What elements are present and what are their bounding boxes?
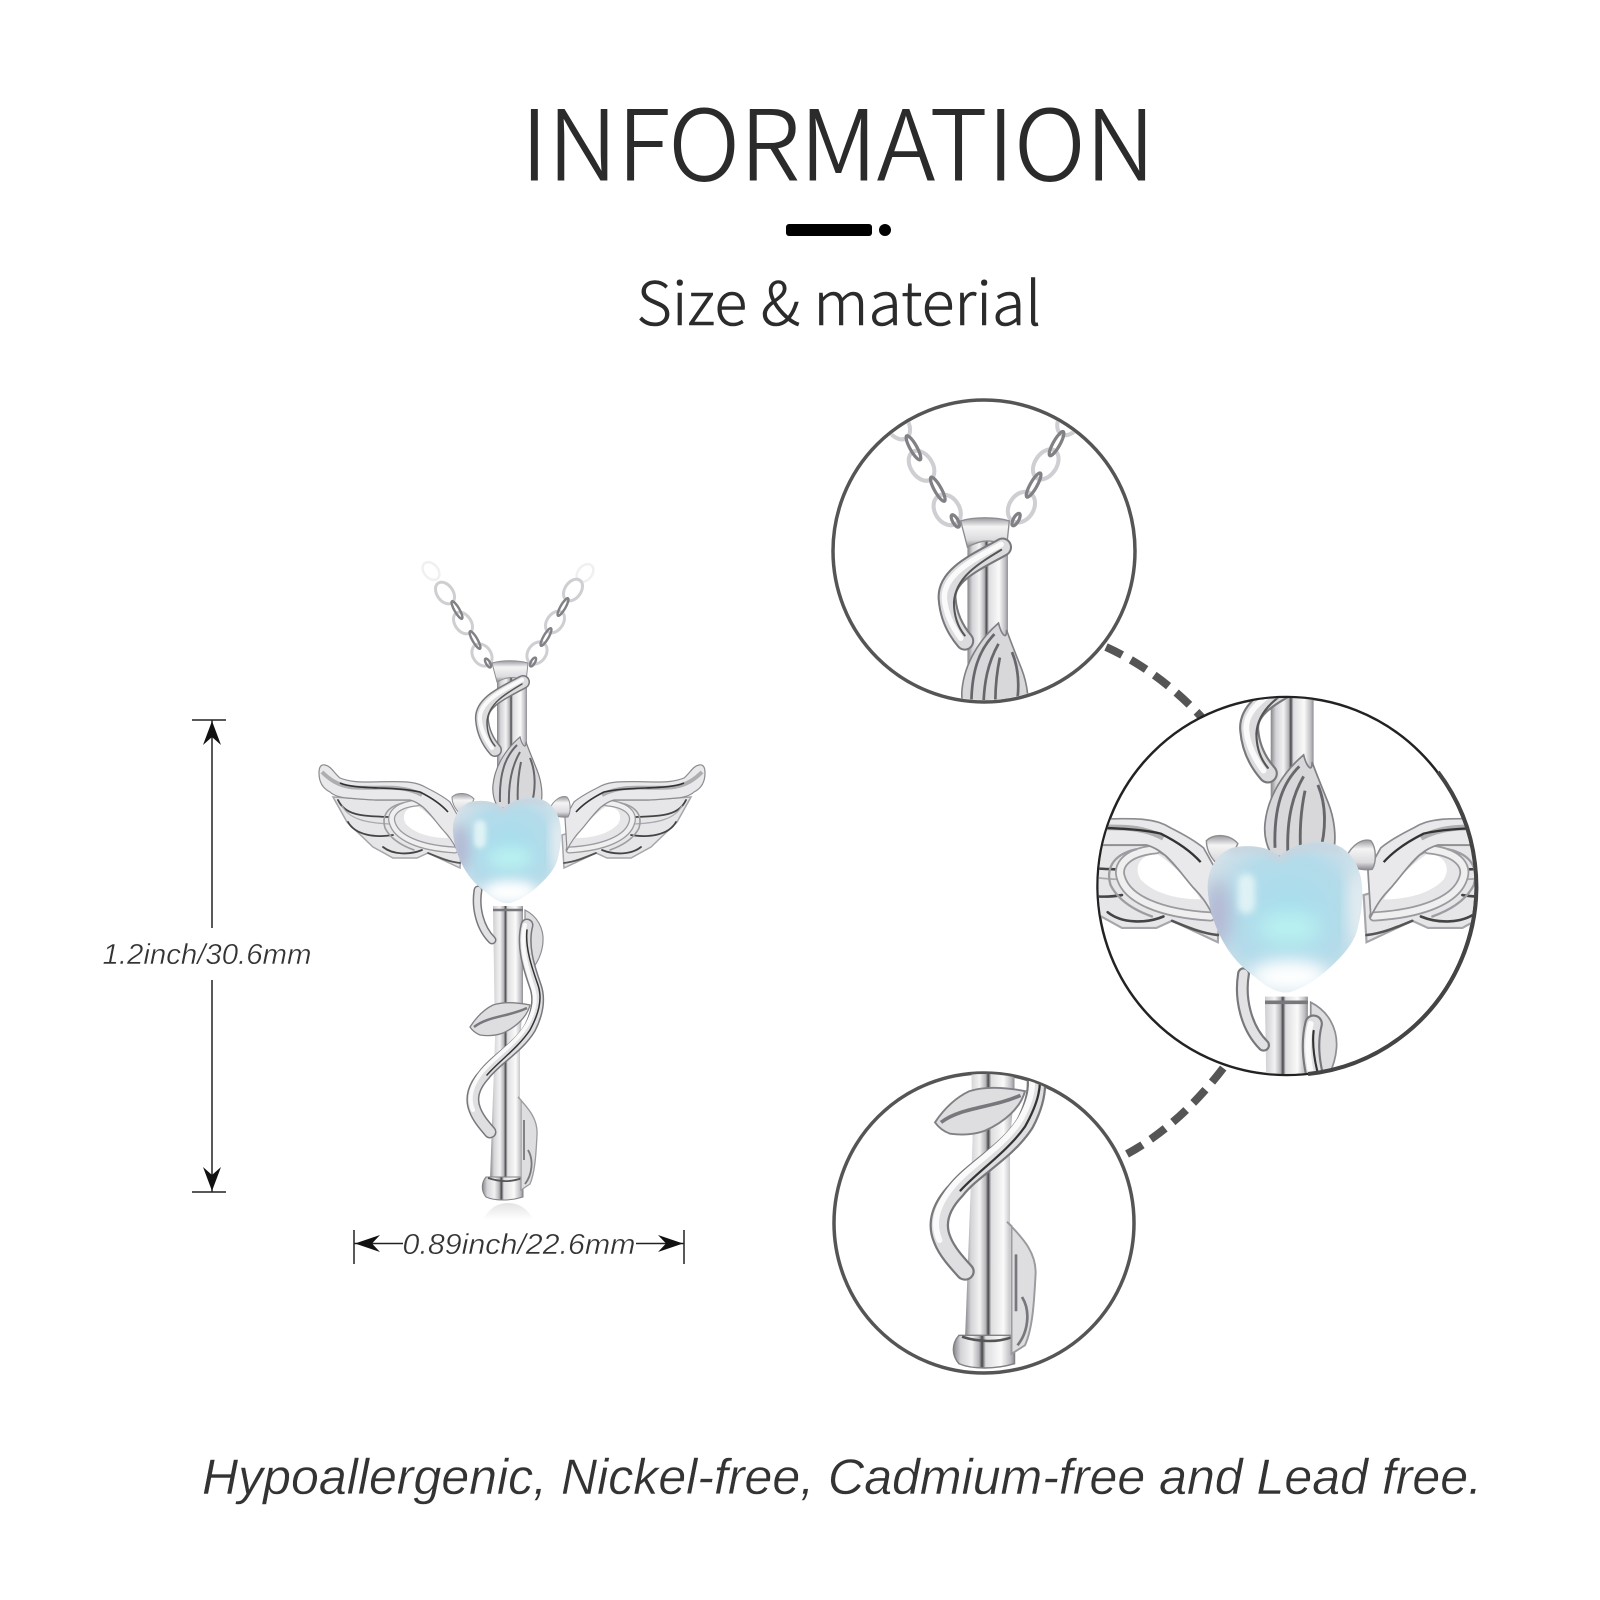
pendant product image <box>319 559 705 1220</box>
detail circle: lower vine and base <box>832 1071 1136 1375</box>
subtitle: Size & material <box>636 256 1042 343</box>
width dimension <box>354 1229 684 1264</box>
detail circle: heart stone and wings <box>1096 696 1478 1076</box>
title: INFORMATION <box>521 67 1155 208</box>
width label: 0.89inch/22.6mm <box>402 1229 636 1261</box>
dashed connector: bottom detail to centre detail <box>1127 1067 1224 1154</box>
height label: 1.2inch/30.6mm <box>102 939 312 971</box>
detail circle: chain and bail <box>831 398 1137 704</box>
title divider: bar and dot <box>786 224 891 236</box>
material statement: Hypoallergenic, Nickel-free, Cadmium-free and Lead free. <box>202 1449 1482 1505</box>
dashed connector: top detail to centre detail <box>1106 647 1206 722</box>
height dimension <box>102 720 312 1192</box>
